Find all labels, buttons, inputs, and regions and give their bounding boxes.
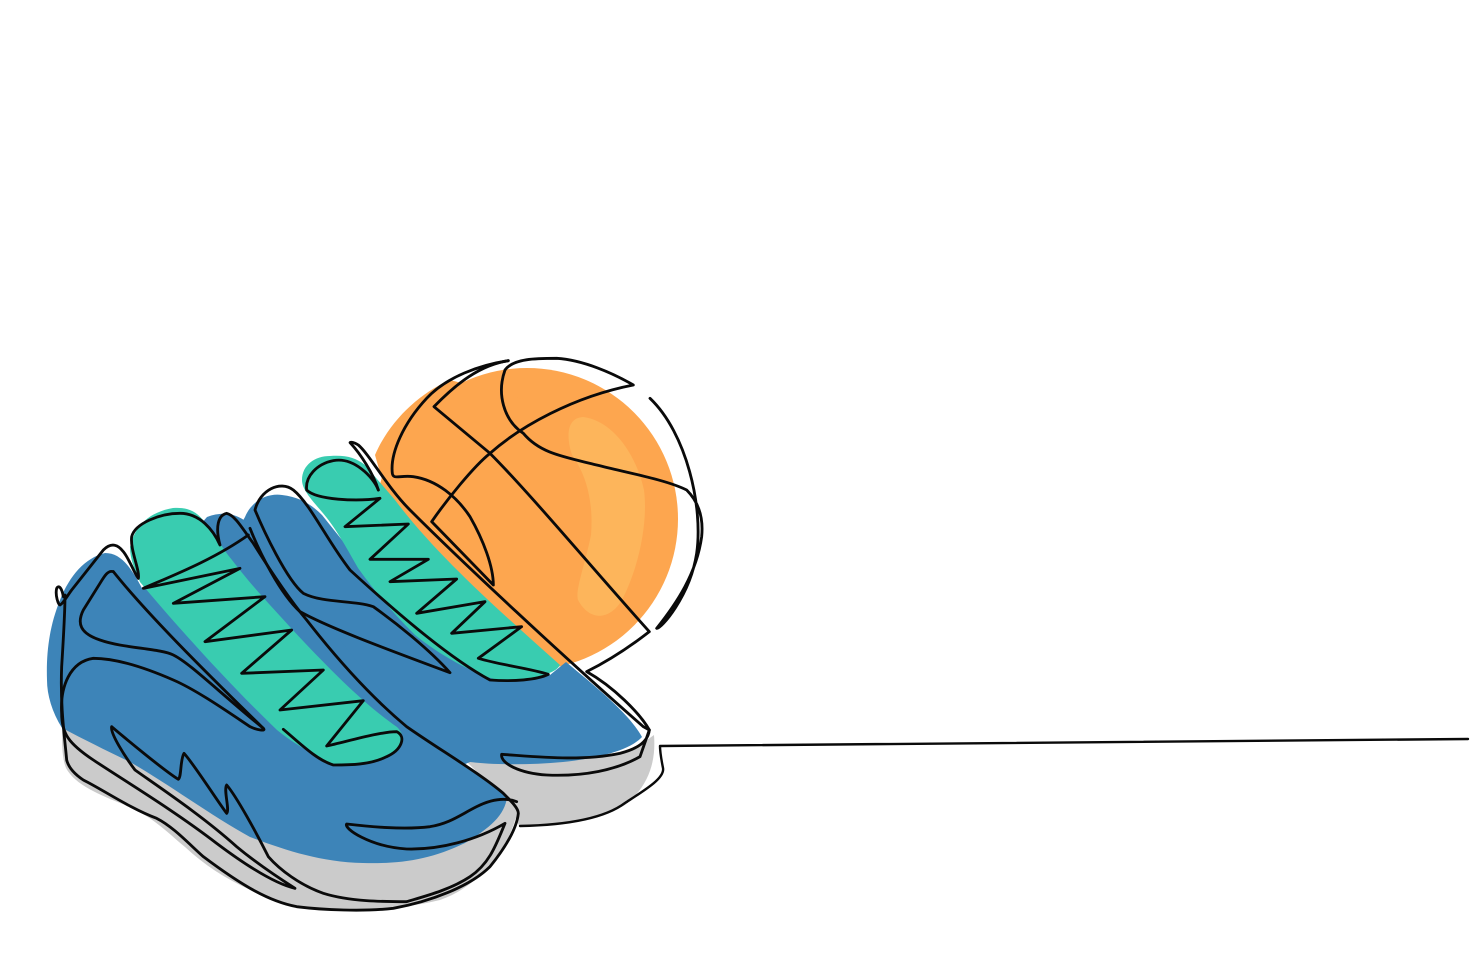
left shoe outline, laces, panels and sole bbox=[56, 513, 518, 910]
continuous ground line bbox=[520, 739, 1468, 826]
ball outline and seams bbox=[392, 358, 702, 730]
left shoe sole fill bbox=[62, 728, 517, 911]
left shoe upper fill bbox=[47, 514, 507, 863]
ball colour fill bbox=[375, 368, 678, 670]
right shoe outline, laces and toe bbox=[250, 442, 649, 775]
left shoe laces fill bbox=[130, 508, 403, 766]
right shoe sole fill bbox=[460, 735, 654, 827]
right shoe laces fill bbox=[302, 456, 560, 680]
right shoe upper fill bbox=[235, 495, 642, 775]
